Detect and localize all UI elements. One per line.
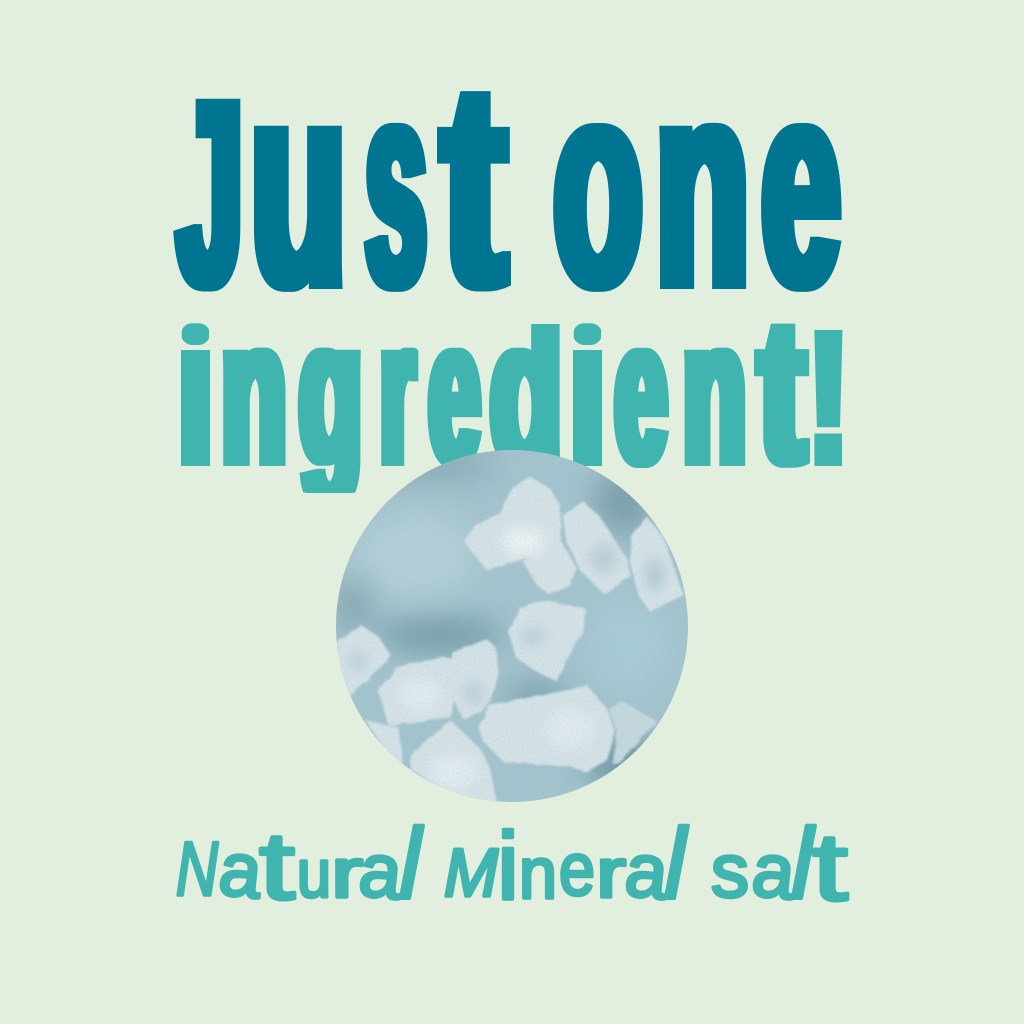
caption: Natural Mineral salt: N (176, 827, 218, 912)
subtitle: ingredient!: e (430, 277, 480, 506)
caption: Natural Mineral salt: u (297, 836, 331, 912)
caption: Natural Mineral salt: a (748, 827, 800, 916)
subtitle: ingredient!: r (381, 277, 414, 506)
title: Just one: s (366, 22, 426, 346)
title: Just one: J (178, 47, 242, 340)
caption: Natural Mineral salt: a (215, 826, 267, 915)
title: Just one: o (554, 22, 642, 346)
caption: Natural Mineral salt: n (519, 834, 557, 914)
caption: Natural Mineral salt: l (791, 808, 816, 920)
caption: Natural Mineral salt: s (711, 829, 749, 914)
caption: Natural Mineral salt (176, 808, 848, 921)
text: e (762, 22, 840, 346)
photo: salt crystals in circle (330, 445, 694, 809)
subtitle: ingredient!: g (300, 277, 362, 506)
subtitle: ingredient!: n (222, 277, 286, 506)
subtitle: ingredient!: e (616, 277, 666, 506)
grain (337, 478, 682, 801)
title: Just one: t (442, 24, 506, 346)
caption: Natural Mineral salt: t (812, 814, 848, 921)
subtitle: ingredient!: t (759, 276, 805, 506)
subtitle: ingredient!: n (684, 277, 746, 506)
title: Just one: u (251, 22, 346, 346)
subtitle: ingredient!: ! (804, 295, 854, 502)
caption: Natural Mineral salt: e (559, 828, 595, 911)
caption: Natural Mineral salt: M (444, 835, 498, 911)
caption: Natural Mineral salt: r (596, 834, 626, 912)
caption: Natural Mineral salt: l (399, 808, 424, 920)
crystal shading (349, 528, 663, 788)
subtitle: ingredient! (181, 323, 842, 493)
title: Just one: n (656, 22, 749, 346)
caption: Natural Mineral salt: a (355, 827, 407, 916)
caption: Natural Mineral salt: a (621, 827, 673, 916)
caption: Natural Mineral salt: l (664, 808, 689, 920)
subtitle: ingredient!: i (566, 295, 608, 502)
crystals (337, 477, 683, 802)
caption: Natural Mineral salt: r (331, 834, 363, 912)
caption: Natural Mineral salt: i (497, 813, 519, 920)
caption: Natural Mineral salt: t (259, 813, 295, 920)
subtitle: ingredient!: d (490, 277, 562, 506)
title: Just one (178, 22, 840, 346)
subtitle: ingredient!: i (174, 295, 216, 502)
